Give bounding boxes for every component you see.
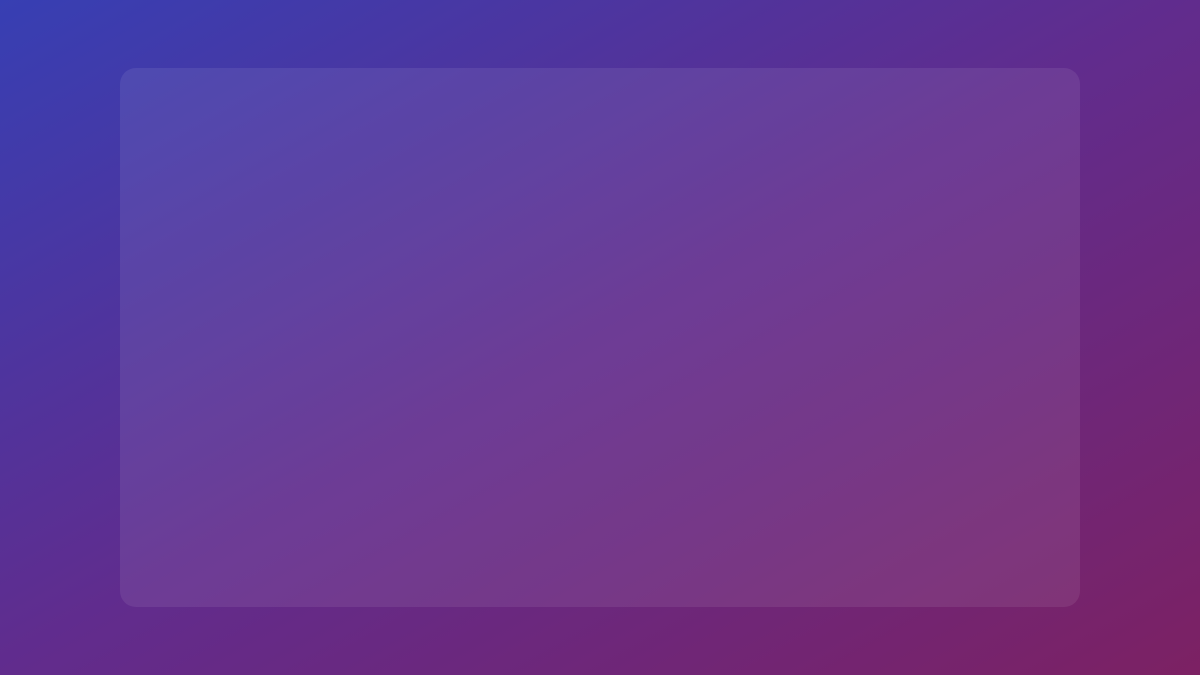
- panel: translucent card: [120, 68, 1080, 607]
